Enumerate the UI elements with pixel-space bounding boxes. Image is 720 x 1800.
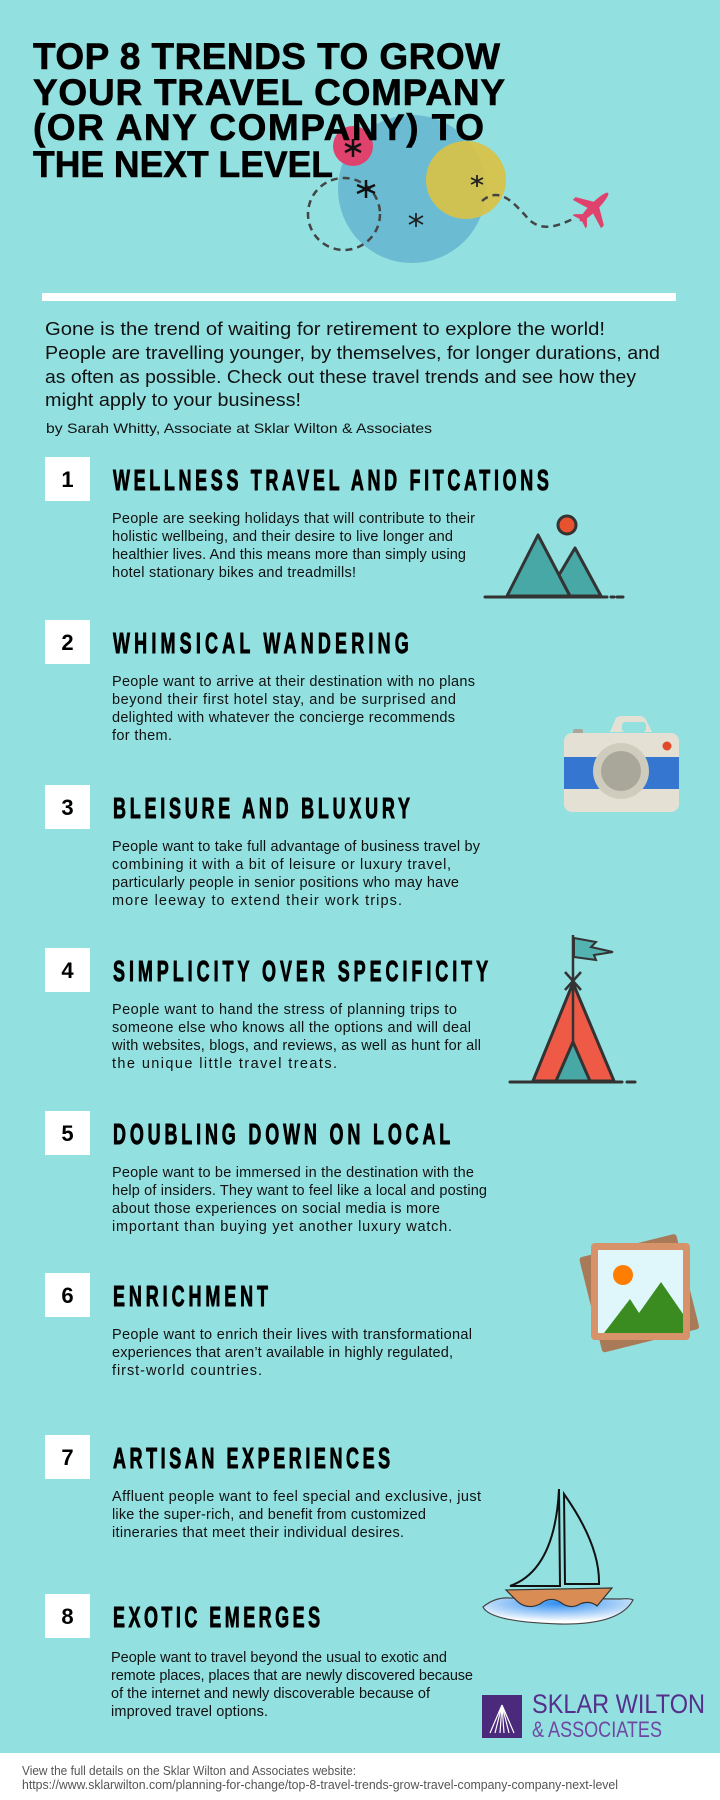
section 8: improved travel options. bbox=[111, 1704, 268, 1720]
section 2: beyond their first hotel stay, and be surprised and bbox=[112, 692, 456, 708]
section 1: healthier lives. And this means more than simply using bbox=[112, 547, 466, 563]
section 5: important than buying yet another luxury watch. bbox=[112, 1219, 452, 1235]
section 4: People want to hand the stress of planning trips to bbox=[112, 1002, 457, 1018]
intro text bbox=[45, 319, 660, 436]
title: THE NEXT LEVEL bbox=[33, 144, 333, 185]
section 5: help of insiders. They want to feel like a local and posting bbox=[112, 1183, 487, 1199]
decoration: globe and plane bbox=[308, 115, 622, 263]
section 2: delighted with whatever the concierge recommends bbox=[112, 710, 455, 726]
section 5: about those experiences on social media is more bbox=[112, 1201, 440, 1217]
footer bbox=[0, 1753, 720, 1800]
footer: View the full details on the Sklar Wilton and Associates website: bbox=[22, 1764, 356, 1778]
section 3: People want to take full advantage of business travel by bbox=[112, 839, 481, 855]
section 4: with websites, blogs, and reviews, as well as hunt for all bbox=[111, 1038, 481, 1054]
icon: mountains bbox=[485, 516, 623, 597]
intro text: Gone is the trend of waiting for retirement to explore the world! bbox=[45, 319, 605, 339]
section 5: People want to be immersed in the destination with the bbox=[112, 1165, 474, 1181]
icon: camera bbox=[564, 716, 679, 812]
section 7: itineraries that meet their individual desires. bbox=[112, 1525, 404, 1541]
section 1: WELLNESS TRAVEL AND FITCATIONS bbox=[113, 465, 549, 497]
section 6 bbox=[45, 1273, 472, 1379]
section 7: ARTISAN EXPERIENCES bbox=[113, 1443, 390, 1475]
intro text: as often as possible. Check out these travel trends and see how they bbox=[45, 367, 636, 387]
section 7 bbox=[45, 1435, 481, 1541]
section 1: People are seeking holidays that will contribute to their bbox=[112, 511, 475, 527]
section 2 bbox=[45, 620, 475, 744]
icon: sailboat bbox=[483, 1489, 633, 1624]
section 8: of the internet and newly discoverable because of bbox=[111, 1686, 431, 1702]
section 2: WHIMSICAL WANDERING bbox=[113, 628, 409, 660]
icon: picture frame bbox=[579, 1234, 700, 1353]
section 6: 6 bbox=[61, 1283, 74, 1308]
section 7: 7 bbox=[61, 1445, 74, 1470]
section 7: like the super-rich, and benefit from customized bbox=[112, 1507, 426, 1523]
section 8 bbox=[45, 1594, 473, 1720]
section 3: more leeway to extend their work trips. bbox=[112, 893, 402, 909]
section 6: experiences that aren’t available in highly regulated, bbox=[112, 1345, 453, 1361]
section 3: BLEISURE AND BLUXURY bbox=[113, 793, 410, 825]
section 3 bbox=[45, 785, 481, 909]
section 4: someone else who knows all the options and will deal bbox=[112, 1020, 471, 1036]
intro text: People are travelling younger, by themselves, for longer durations, and bbox=[45, 343, 660, 363]
section 2: 2 bbox=[61, 630, 74, 655]
section 7: Affluent people want to feel special and exclusive, just bbox=[112, 1489, 481, 1505]
section 5: DOUBLING DOWN ON LOCAL bbox=[113, 1119, 450, 1151]
section 1 bbox=[45, 457, 549, 581]
section 4: 4 bbox=[61, 958, 74, 983]
section 1: hotel stationary bikes and treadmills! bbox=[112, 565, 356, 581]
section 5 bbox=[45, 1111, 487, 1235]
intro text: by Sarah Whitty, Associate at Sklar Wilton & Associates bbox=[46, 420, 432, 436]
section 8: remote places, places that are newly discovered because bbox=[111, 1668, 473, 1684]
section 4: the unique little travel treats. bbox=[112, 1056, 337, 1072]
section 2: for them. bbox=[112, 728, 172, 744]
section 6: People want to enrich their lives with transformational bbox=[112, 1327, 472, 1343]
title bbox=[33, 36, 505, 185]
intro text: might apply to your business! bbox=[45, 390, 301, 410]
section 2: People want to arrive at their destination with no plans bbox=[112, 674, 475, 690]
section 4: SIMPLICITY OVER SPECIFICITY bbox=[113, 956, 488, 988]
section 1: holistic wellbeing, and their desire to live longer and bbox=[112, 529, 453, 545]
title: TOP 8 TRENDS TO GROW bbox=[33, 36, 500, 77]
section 3: combining it with a bit of leisure or luxury travel, bbox=[112, 857, 451, 873]
section 8: 8 bbox=[61, 1604, 74, 1629]
footer: https://www.sklarwilton.com/planning-for-change/top-8-travel-trends-grow-travel-company-company-next-level bbox=[22, 1778, 618, 1792]
section 5: 5 bbox=[61, 1121, 74, 1146]
title: (OR ANY COMPANY) TO bbox=[33, 107, 484, 148]
section 3: 3 bbox=[61, 795, 74, 820]
title: YOUR TRAVEL COMPANY bbox=[33, 72, 505, 113]
section 6: first-world countries. bbox=[112, 1363, 262, 1379]
logo: & ASSOCIATES bbox=[532, 1717, 662, 1742]
icon: plane bbox=[565, 179, 622, 236]
icon: tent bbox=[510, 935, 635, 1082]
section 3: particularly people in senior positions who may have bbox=[112, 875, 459, 891]
logo bbox=[482, 1689, 705, 1742]
section 8: People want to travel beyond the usual to exotic and bbox=[111, 1650, 447, 1666]
section 8: EXOTIC EMERGES bbox=[113, 1602, 320, 1634]
section 4 bbox=[45, 948, 488, 1072]
section 1: 1 bbox=[61, 467, 74, 492]
section 6: ENRICHMENT bbox=[113, 1281, 268, 1313]
